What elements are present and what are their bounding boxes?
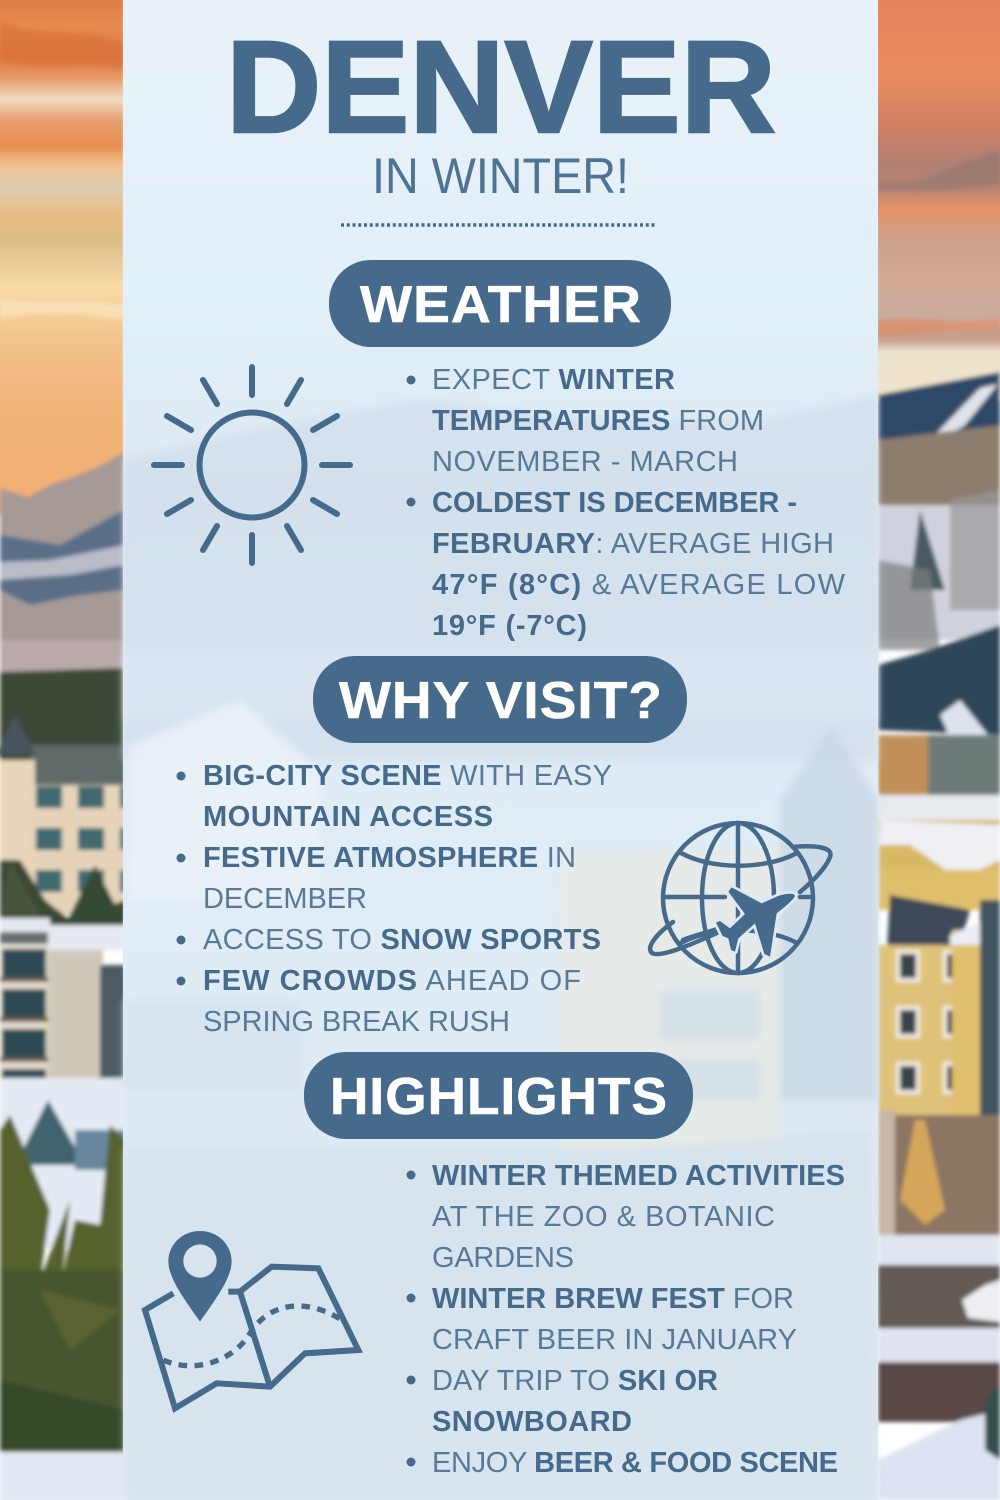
text block: why visit bullets: FEW CROWDS AHEAD OF [203,965,581,997]
heading pill: why visit [313,656,687,743]
text block: why visit bullets: BIG-CITY SCENE WITH EASY [203,760,612,792]
text block: weather bullets: 47°F (8°C) & AVERAGE LOW [432,569,846,601]
text block: highlights bullets: DAY TRIP TO SKI OR [432,1365,718,1397]
title: DENVER: DENVER [226,13,776,160]
text block: highlights bullets: AT THE ZOO & BOTANIC [432,1201,775,1233]
text block: weather bullets: FEBRUARY: AVERAGE HIGH [432,528,834,560]
photo background: left strip [0,0,126,1500]
text block: why visit bullets: FESTIVE ATMOSPHERE IN [203,842,576,874]
heading pill: weather: WEATHER [360,276,642,334]
text block: highlights bullets: SNOWBOARD [432,1406,632,1438]
text block: highlights bullets: WINTER THEMED ACTIVITIES [432,1160,845,1192]
text block: highlights bullets: GARDENS [432,1242,574,1274]
heading pill: weather [329,260,671,347]
text block: highlights bullets [406,1160,845,1479]
translucent centre panel [123,0,878,1500]
text block: highlights bullets: WINTER BREW FEST FOR [432,1283,794,1315]
text block: weather bullets: 19°F (-7°C) [432,610,587,642]
text block: weather bullets: NOVEMBER - MARCH [432,446,738,478]
text block: highlights bullets: CRAFT BEER IN JANUARY [432,1324,797,1356]
text block: why visit bullets [176,760,612,1038]
text block: weather bullets: TEMPERATURES FROM [432,405,764,437]
icon: map with pin [145,1231,358,1408]
text block: weather bullets [406,364,846,642]
heading pill: highlights: HIGHLIGHTS [330,1068,668,1126]
photo background: right strip [875,0,1000,1500]
text block: why visit bullets: ACCESS TO SNOW SPORTS [203,924,601,956]
text block: weather bullets: COLDEST IS DECEMBER - [432,487,797,519]
heading pill: highlights [304,1052,693,1139]
text block: why visit bullets: SPRING BREAK RUSH [203,1006,510,1038]
text block: why visit bullets: DECEMBER [203,883,367,915]
text block: weather bullets: EXPECT WINTER [432,364,675,396]
icon: sun [154,367,350,563]
text block: why visit bullets: MOUNTAIN ACCESS [203,801,493,833]
dotted divider [341,223,656,227]
icon: globe with plane [650,823,831,973]
text block: highlights bullets: ENJOY BEER & FOOD SCENE [432,1447,838,1479]
heading pill: why visit: WHY VISIT? [339,672,663,730]
subtitle: IN WINTER! [372,148,629,204]
